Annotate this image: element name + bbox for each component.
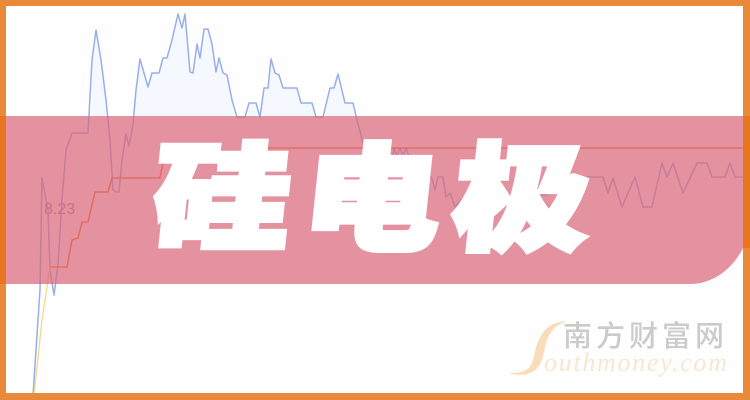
- frame right darker section: [743, 116, 750, 248]
- yellow average line: [34, 267, 50, 395]
- frame top: [0, 0, 750, 6]
- logo swoosh S: [509, 321, 567, 375]
- axis label: 8.23: [44, 201, 75, 218]
- title: 硅电极: [146, 107, 614, 274]
- chart area fill: [92, 14, 357, 125]
- frame left darker section: [0, 116, 6, 284]
- frame right: [743, 0, 750, 400]
- frame left: [0, 0, 6, 400]
- orange average line: [50, 148, 744, 267]
- frame bottom: [0, 393, 750, 400]
- brand name: 南方财富网: [563, 313, 728, 355]
- watermark logo: [509, 313, 729, 377]
- pink title band: [6, 116, 743, 284]
- brand url: outhmoney.com: [544, 348, 729, 377]
